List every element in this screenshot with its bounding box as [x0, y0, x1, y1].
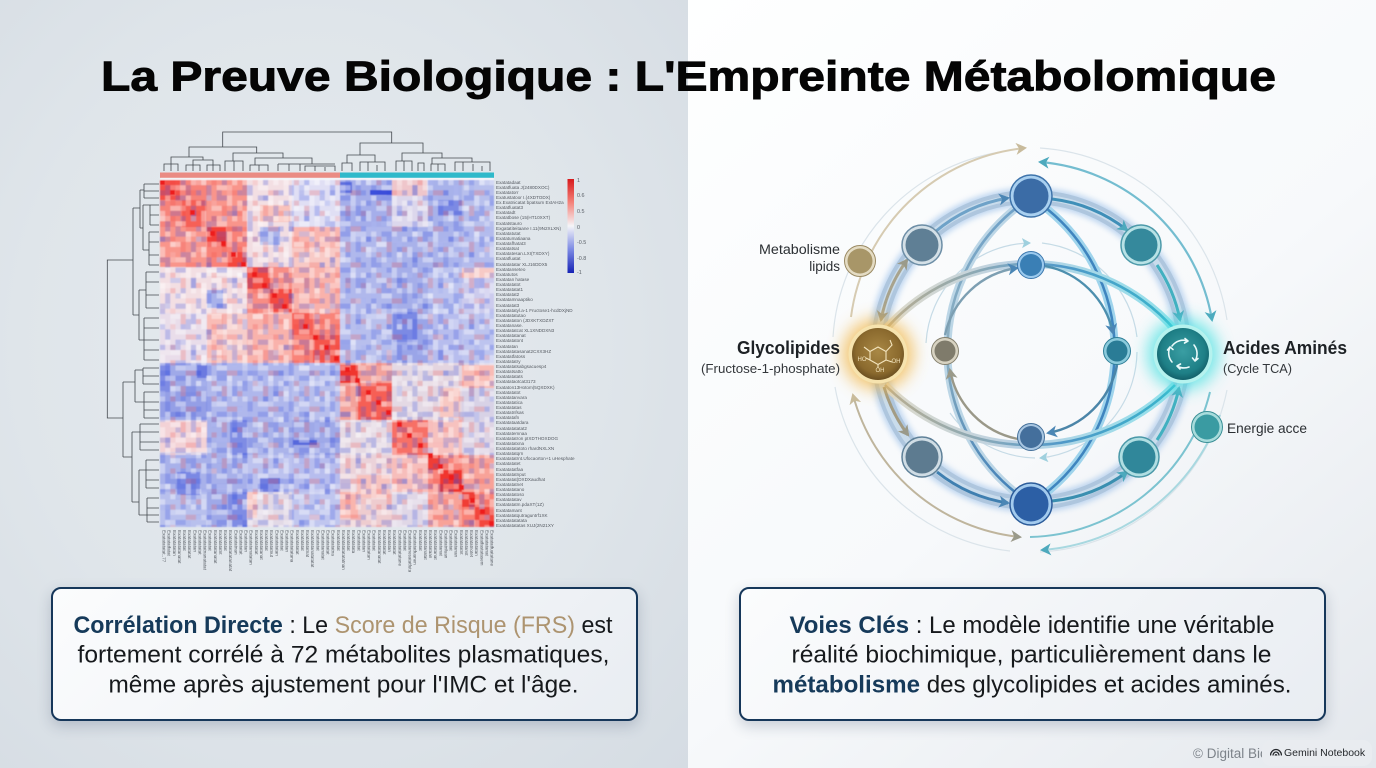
column labels: Exatatatat	[300, 530, 305, 551]
row labels: Exatatadaat	[496, 180, 521, 184]
block row D	[160, 313, 494, 363]
vertical lens arcs	[947, 205, 1115, 496]
column labels	[162, 530, 494, 572]
row labels: Exatatatatatoto rhardNXLXN	[496, 446, 554, 451]
column labels: Exatatatata	[351, 530, 356, 553]
row labels: Exatatatatutao	[496, 313, 526, 318]
node: lipid metabolism	[844, 246, 876, 276]
row labels: Exatatatanvara	[496, 395, 527, 400]
column labels: Exatatatatatat	[187, 530, 192, 558]
column labels: Exatatatan	[361, 530, 366, 552]
node: inner right	[1104, 338, 1130, 364]
correlation heatmap	[160, 178, 494, 527]
row labels: Exatatamnaaptiko	[496, 297, 533, 302]
row labels: Exatatatatanat	[496, 333, 526, 338]
icon: molecule: OH	[876, 368, 884, 374]
row labels: Exatatatatot	[496, 390, 521, 395]
node: inner top	[1018, 252, 1044, 278]
column labels: Exatatatanatat	[423, 530, 428, 560]
row labels: Exatatatatano	[496, 487, 524, 492]
node: upper left	[902, 225, 942, 265]
row labels: Exatatatatoso	[496, 492, 524, 497]
block row E	[160, 363, 494, 420]
icon: molecule	[858, 340, 900, 374]
off-diagonal features	[160, 180, 494, 527]
column labels: Exatatatan	[192, 530, 197, 552]
node: upper right	[1121, 225, 1161, 265]
row labels: Exatatatan	[496, 344, 518, 348]
row labels: Exatatatatqutraguntrf1XK	[496, 513, 548, 518]
icon: molecule: OH	[892, 359, 900, 365]
row labels: Exatatatatcat XL1XNDDXN3	[496, 328, 554, 333]
label: Glycolipides	[701, 338, 840, 376]
column labels: Exatatatat	[402, 530, 407, 551]
background: left panel	[0, 0, 688, 768]
label: Metabolisme lipids: lipids	[809, 259, 840, 274]
column labels: Exatatatatat	[382, 530, 387, 555]
row labels: Exatatatatat1	[496, 287, 523, 292]
column labels: Exatatatan	[284, 530, 290, 552]
column labels: Exatatatanatat	[320, 530, 325, 560]
row labels: Exatatataton (JDXKTXDZXT	[496, 318, 554, 323]
icon: cycle arrows	[1168, 338, 1198, 369]
column labels: Exatatatatfuanen	[413, 530, 418, 565]
column labels: Exatatatanan	[454, 530, 459, 557]
colour scale legend	[568, 178, 586, 276]
node: inner bottom	[1018, 424, 1044, 450]
row labels: Exatatatemnaa	[496, 431, 527, 436]
row labels: Exatatatorr	[496, 190, 518, 195]
faint inner ring	[926, 243, 1137, 458]
row labels: Exatatfuatat	[496, 256, 521, 261]
column labels: Exatatatatatana	[290, 530, 295, 562]
row labels: Exatatafhatat3	[496, 241, 526, 246]
row labels: Exatatataatdara	[496, 420, 528, 425]
callout: corrélation directe: fortement corrélé à 72 métabolites plasmatiques,	[78, 642, 610, 668]
column labels: Exatatatat	[223, 530, 228, 551]
row labels: Exatatatatet	[496, 461, 521, 466]
block row F	[160, 420, 494, 455]
column labels: Exatatatan	[244, 530, 248, 552]
diagonal red blocks	[160, 180, 494, 527]
label: Acides Aminés	[1223, 338, 1347, 376]
outer arc arrows	[851, 148, 1220, 550]
badge: Gemini Notebook	[1262, 740, 1372, 766]
node: bottom hub	[1010, 483, 1052, 525]
column labels: Exatatatatat	[254, 530, 259, 555]
main ring band	[878, 197, 1184, 503]
row labels: Exatatatnfsas	[496, 410, 524, 415]
row labels: Exataton13Hotom(5QXDXK)	[496, 384, 554, 390]
column labels: Exatatatatanat	[433, 530, 438, 560]
dendrogram: left	[107, 184, 159, 522]
column labels: Exatatatatat	[238, 530, 243, 555]
row labels: Exatatatfatoss	[496, 354, 525, 359]
column labels: Exatatatatatatatnan	[341, 530, 346, 570]
column labels: Exatatatanat	[438, 530, 443, 556]
column labels: Exatatatatanat	[259, 530, 264, 560]
row labels: Exatatatatnet	[496, 482, 523, 487]
colour scale legend: -0.8	[577, 256, 586, 262]
footer credit: © Digital Bic	[1193, 746, 1265, 761]
row labels: Exatatanase.	[496, 323, 523, 328]
column labels: Exatatatatat	[295, 530, 300, 555]
metabolic network diagram	[701, 143, 1347, 556]
panel: heatmap with dendrograms	[106, 132, 586, 572]
column labels: Exatatatnotet	[469, 530, 474, 557]
colour scale legend: 0.5	[577, 209, 584, 215]
colour bar: cluster strip	[160, 172, 494, 178]
callout: voies clés	[739, 587, 1326, 721]
row labels: Exatatatatrnt.Ufocaorton+1 uHesphate	[496, 456, 575, 461]
row labels: Exatatfuatat3	[496, 205, 523, 210]
column labels: Exatatatat	[264, 530, 269, 551]
colour scale legend: 0.6	[577, 193, 584, 199]
diagonal line	[160, 180, 494, 526]
block row C	[160, 267, 494, 313]
row labels: Exatatatatar XLJ16DDX5	[496, 262, 547, 266]
column labels: Exatatatatanatat	[377, 530, 382, 563]
row labels: Exatatatatasanat2CXX3HZ	[496, 349, 551, 354]
callout: corrélation directe: même après ajustement pour l'IMC et l'âge.	[108, 672, 578, 698]
column labels: Exatatatat	[372, 530, 377, 551]
dendrogram: top	[164, 132, 490, 171]
block row B	[160, 227, 494, 267]
node: lower left	[902, 437, 942, 477]
row labels: Exatatfuata J(2480DXOC)	[496, 185, 549, 190]
block row A	[160, 180, 494, 227]
row labels: Exatatatat(DXDXaudhat	[496, 477, 545, 482]
column labels: Exatatatatna	[331, 530, 336, 556]
row labels: Exatatatatont	[496, 338, 523, 343]
row labels: Exatatstauro	[496, 220, 522, 226]
column labels: Exatatatatnt	[459, 530, 464, 555]
row labels: Exatatatatot	[496, 282, 521, 287]
node: Acides Aminés hub with cycle icon	[1147, 318, 1219, 390]
ring flow arrows	[881, 198, 1180, 503]
row labels: Exatatatatatata	[496, 518, 527, 523]
column labels: Exatatatanesatatfuta	[408, 530, 412, 572]
column labels: Exatatatatat	[326, 530, 330, 555]
title: La Preuve Biologique : L'Empreinte Métabolomique	[101, 52, 1276, 100]
row labels: Exatatatatas	[496, 405, 522, 410]
row labels: Exatatatatfaa	[496, 466, 523, 472]
row labels: Exatatatatsabgsacuesp4	[496, 364, 546, 369]
colour scale legend: -0.5	[577, 240, 586, 246]
column labels: Exatatatnan	[233, 530, 238, 555]
row labels: Exatatatatxna	[496, 441, 524, 446]
callout: corrélation directe	[51, 587, 638, 721]
column labels: Exatatatatatatanatat	[228, 530, 233, 571]
row labels: Exatatatatats	[496, 374, 523, 379]
callout: voies clés: réalité biochimique, particulièrement dans le	[792, 642, 1272, 668]
label: Acides Aminés: (Cycle TCA)	[1223, 361, 1292, 376]
node: energy	[1192, 412, 1222, 442]
horizontal lens arcs	[885, 264, 1175, 445]
row labels: Exatatatat2	[496, 292, 519, 297]
column labels: Exatatatatnut	[269, 530, 274, 557]
column labels: Exatatatanatatatat	[310, 530, 315, 567]
column labels: Exatatatfuatatane	[490, 530, 494, 566]
column labels: Exatatatatat	[392, 530, 397, 555]
row labels: Exatatatatav	[496, 497, 522, 502]
block row G	[160, 455, 494, 492]
callout: voies clés: métabolisme des glycolipides et acides aminés.	[772, 672, 1292, 698]
row labels: Exatatatatatas XUJ(2N21XY	[496, 523, 554, 528]
column labels: Exatatatat	[448, 530, 454, 551]
row labels: Exatatamant	[496, 508, 522, 512]
row labels	[496, 180, 575, 528]
row labels: Exatustatoor I.(4XDTODX)	[496, 195, 550, 200]
background: right panel	[688, 0, 1376, 768]
column labels: Exatatatatatan	[366, 530, 372, 560]
column labels: Exatatatatan	[274, 530, 279, 556]
faint outer rings	[833, 148, 1227, 552]
column labels: Exatatatataan	[428, 530, 433, 558]
node: lower right	[1119, 437, 1159, 477]
row labels: Exgatatiteitaane I.11(9N2XLXN)	[496, 226, 561, 231]
row labels: Exatatatatica	[496, 400, 523, 405]
column labels: Exatatatat	[182, 530, 187, 551]
column labels: Exatatatat	[315, 530, 320, 551]
column labels: Exatatatatanatat	[177, 530, 182, 563]
column labels: Exatatatat	[279, 530, 284, 551]
label: Metabolisme lipids	[759, 242, 840, 274]
callout: voies clés: Voies Clés : Le modèle identifie une véritable	[790, 612, 1274, 639]
row labels: Exatatatat3	[496, 302, 519, 308]
column labels: Exatatatanst	[464, 530, 469, 556]
row labels: Exatatadt	[496, 210, 515, 215]
label: Glycolipides: (Fructose-1-phosphate)	[701, 361, 840, 376]
row labels: Exatatatatnput	[496, 472, 526, 477]
label: Acides Aminés: Acides Aminés	[1223, 338, 1347, 358]
badge: Gemini Notebook: Gemini Notebook	[1284, 747, 1365, 759]
row labels: Exatatutos	[496, 272, 518, 277]
row labels: Ex.Exatnicatat bpatsum ExtAH2a	[496, 200, 564, 205]
column labels: Exatatatatan	[474, 530, 479, 556]
row labels: Exatatanseteo	[496, 267, 525, 272]
icon: molecule: HO	[858, 357, 867, 363]
row labels: Exatatbose (15(HT10XXT)	[496, 215, 550, 220]
column labels: Exatatatan	[387, 530, 392, 552]
row labels: Exatatatutat	[496, 231, 521, 236]
label: Metabolisme lipids: Metabolisme	[759, 242, 840, 257]
column labels: Exatatatatanatat	[213, 530, 218, 563]
white divider over strip	[160, 178, 494, 180]
label: Energie: Energie acce	[1227, 420, 1307, 436]
column labels: Exatatatatnt	[218, 530, 223, 555]
row labels: Exatatumatiaana	[496, 236, 530, 241]
inner circle arrows	[945, 266, 1117, 439]
column labels: Exatatatat	[346, 530, 351, 551]
column labels: Exatatfastatasem	[479, 530, 484, 566]
column labels: Exatatatnfuan	[443, 530, 448, 558]
column labels: Exatatatanat	[484, 530, 489, 556]
column labels: Exatatatanatatan	[249, 530, 254, 565]
row labels: Exatatatsatto	[496, 369, 523, 374]
row labels: Exatatan hatase	[496, 277, 529, 282]
column labels: Exatatatatnat	[305, 530, 310, 557]
node: inner left	[932, 338, 958, 364]
column labels: Exatatatatat	[197, 530, 202, 555]
row labels: Exatatatatyl.a-1 Fructose1-hcdDXjND	[496, 308, 573, 313]
noise cells	[160, 180, 494, 527]
column labels: Exatatatat	[208, 530, 213, 551]
colour scale legend: -1	[577, 270, 582, 276]
column labels: Exatatatat	[336, 530, 341, 551]
row labels: Exatatatatron pIXDTHOXDOG	[496, 436, 558, 441]
column labels: Exatatatatan	[172, 530, 177, 556]
column labels: Exatatatatatatane	[397, 530, 402, 566]
column labels: Exatatatatat..77	[162, 530, 166, 562]
colour scale legend: 1	[577, 178, 580, 184]
column labels: Exatatatfatat	[167, 530, 172, 556]
column labels: Exatatatat	[356, 530, 361, 551]
row labels: Exatatatatm.pdaXT(1Z)	[496, 502, 544, 507]
row labels: Exatatataotcat3173	[496, 379, 536, 384]
block row H	[160, 492, 494, 527]
node: Glycolipides hub with molecule icon	[842, 318, 914, 390]
row labels: Exatatatatqrn	[496, 451, 523, 456]
node: top hub	[1010, 175, 1052, 217]
column labels: Exatatatatnanatatat	[202, 530, 208, 570]
row labels: Exatatatatatat2	[496, 426, 527, 430]
column labels: Exatatatat	[418, 530, 423, 551]
row labels: Exatatatsat	[496, 246, 519, 251]
row labels: Exatatatatry	[496, 359, 521, 364]
callout: corrélation directe: Corrélation Directe : Le Score de Risque (FRS) est	[74, 612, 613, 639]
row labels: Exatatatesan.LXI(TXDXY)	[496, 251, 549, 256]
label: Glycolipides: Glycolipides	[737, 338, 840, 358]
row labels: Exatatatafn	[496, 415, 519, 420]
colour scale legend: 0	[577, 225, 580, 231]
